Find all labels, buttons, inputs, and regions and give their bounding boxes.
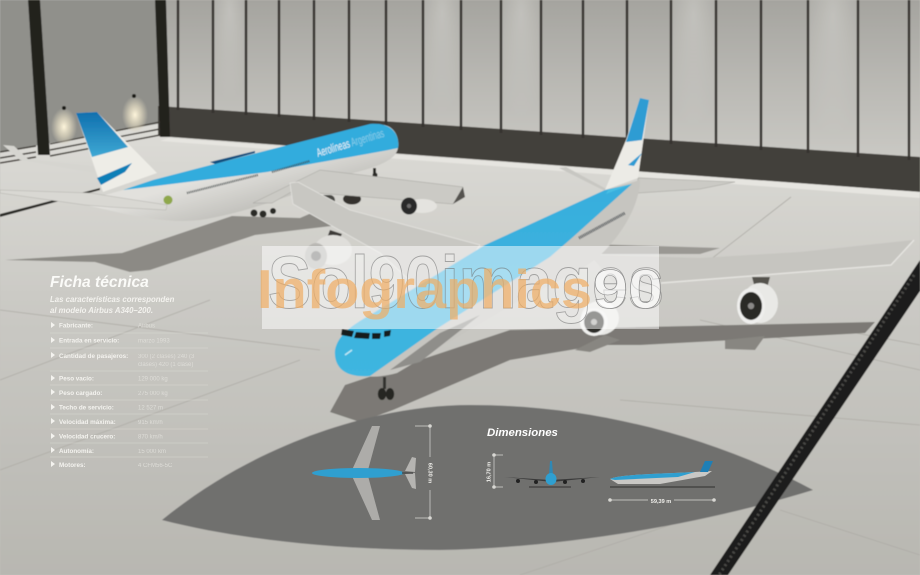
wingspan dimension: 60,30 m: [427, 463, 433, 483]
table rows: Cantidad de pasajeros:: [59, 353, 128, 360]
gear: [250, 168, 378, 218]
back wall floor highlight: [160, 138, 920, 198]
table rows: clases) 420 (1 clase): [138, 362, 193, 368]
floor shadow: main plane: [330, 322, 875, 422]
floor shadow: back plane: [5, 205, 470, 272]
front wing: [253, 170, 463, 204]
grey belly shade: [390, 315, 480, 370]
wall base slats: [0, 122, 160, 163]
plane top view: [312, 426, 416, 520]
plane front view: [504, 461, 600, 487]
fin: [605, 98, 649, 190]
windows: [579, 213, 625, 238]
windows: [187, 161, 310, 193]
floor: [0, 120, 920, 575]
floor shadow: wing detail: [575, 335, 765, 352]
table rows: Entrada en servicio:: [59, 338, 119, 344]
floor joints: [0, 197, 920, 575]
back plane: [0, 112, 465, 221]
grey dimensions area: [162, 405, 813, 550]
table rows: 12 527 m: [138, 406, 163, 412]
door pillars: [178, 0, 909, 160]
table rows: Motores:: [59, 462, 86, 469]
far stabiliser: [3, 145, 95, 173]
fuselage: [335, 180, 640, 377]
table rows: 275 000 kg: [138, 391, 168, 397]
technical sheet: [50, 274, 208, 469]
dimensions heading: Dimensiones: [487, 427, 558, 439]
near stabiliser: [0, 190, 167, 210]
table rows: Techo de servicio:: [59, 404, 114, 412]
table rows: 915 km/h: [138, 420, 163, 426]
technical sheet: al modelo Airbus A340–200.: [50, 306, 153, 315]
table rows: Velocidad máxima:: [59, 419, 116, 426]
watermark white numerals: 90: [593, 258, 663, 320]
height dimension: 16,70 m: [486, 462, 492, 482]
height dimension: [486, 453, 503, 489]
under wing parts: [305, 194, 361, 210]
far wing dark: [210, 151, 255, 164]
watermark: [257, 241, 664, 329]
blue top: [123, 124, 398, 190]
far stabiliser: [559, 167, 610, 191]
length dimension: 59,39 m: [651, 499, 671, 505]
table rows: Airbus: [138, 324, 155, 330]
table rows: 4 CFM56-5C: [138, 463, 173, 469]
table rows: [50, 322, 208, 469]
dark base band: [158, 106, 920, 192]
fuselage: [87, 125, 398, 221]
tail logo: [164, 196, 172, 204]
table rows: 870 km/h: [138, 434, 163, 440]
left wing: [290, 182, 480, 290]
dimensions panel: [312, 424, 716, 520]
main plane: [290, 98, 914, 400]
concrete wall: [0, 0, 168, 152]
table rows: Peso vacío:: [59, 376, 94, 382]
blue top: [335, 184, 632, 376]
nose highlight: [345, 350, 352, 355]
sheet subtitle: Las características corresponden: [50, 295, 175, 304]
plane side view: [610, 461, 715, 487]
table rows: Peso cargado:: [59, 390, 102, 397]
fin: [76, 112, 157, 192]
hangar door panels: [165, 0, 920, 159]
inner right engine: [580, 301, 619, 336]
right wing: [590, 240, 914, 290]
table rows: Velocidad crucero:: [59, 434, 115, 440]
right outer engine: [737, 277, 778, 324]
table rows: 300 (2 clases) 240 (3: [138, 354, 195, 360]
wall lamps: [51, 94, 148, 144]
door light glows: [214, 0, 857, 150]
watermark orange text: Infographics: [257, 258, 592, 320]
cockpit windows: [341, 329, 391, 339]
table rows: Autonomía:: [59, 448, 94, 455]
airline name: Aerolíneas Argentinas: [315, 126, 386, 160]
length dimension: [608, 498, 716, 505]
left engine: [305, 230, 352, 269]
table rows: marzo 1993: [138, 338, 170, 344]
table rows: 15 000 km: [138, 449, 166, 455]
table rows: Fabricante:: [59, 322, 93, 330]
floor slot left: [0, 188, 100, 217]
engine: [401, 198, 437, 214]
black floor channel: [710, 260, 920, 575]
nose gear: [378, 377, 394, 400]
wall columns: [28, 0, 170, 155]
sheet title: Ficha técnica: [50, 274, 149, 291]
wingspan dimension: [415, 424, 433, 520]
watermark outlined text: Sol90images: [268, 241, 664, 324]
table rows: 129 000 kg: [138, 376, 168, 382]
